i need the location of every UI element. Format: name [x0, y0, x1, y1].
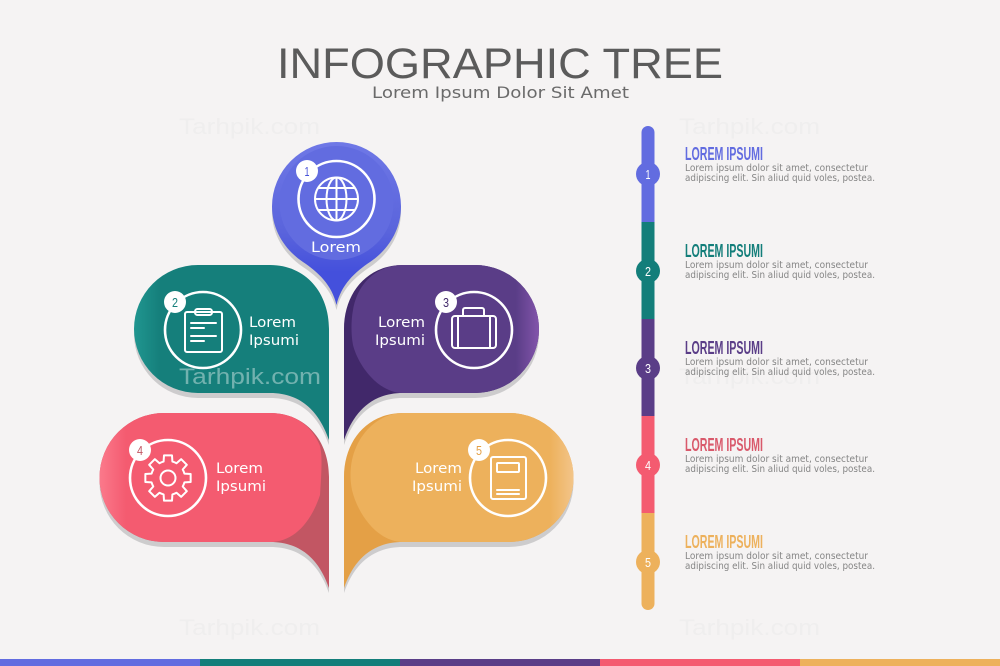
text block 1: adipiscing elit. Sin aliud quid voles, postea. — [685, 173, 875, 184]
text: Tarhpik.com — [679, 615, 820, 640]
label: Lorem Ipsumi: Lorem — [378, 315, 425, 331]
bottom colour bar — [0, 659, 1000, 666]
text block 2: LOREM IPSUMI — [685, 241, 763, 261]
badge 4 — [129, 439, 151, 461]
text block 1 — [685, 144, 875, 184]
marker 1 — [636, 162, 660, 186]
marker 2: 2 — [645, 264, 651, 279]
text block 4: adipiscing elit. Sin aliud quid voles, postea. — [685, 464, 875, 475]
text block 4 — [685, 435, 875, 475]
text block 2: Lorem ipsum dolor sit amet, consectetur — [685, 260, 868, 271]
label: Lorem Ipsumi — [412, 461, 462, 495]
icon: ring and clipboard — [165, 292, 241, 368]
text block 4: LOREM IPSUMI — [685, 435, 763, 455]
marker 1: 1 — [646, 167, 650, 182]
marker 3 — [636, 356, 660, 380]
badge 4: 4 — [137, 443, 143, 458]
watermark: Tarhpik.com — [179, 364, 321, 389]
text block 1: Lorem ipsum dolor sit amet, consectetur — [685, 163, 868, 174]
marker 2 — [636, 259, 660, 283]
marker 5 — [636, 550, 660, 574]
text block 2: adipiscing elit. Sin aliud quid voles, postea. — [685, 270, 875, 281]
text: Tarhpik.com — [179, 114, 320, 139]
badge 2: 2 — [172, 295, 178, 310]
text block 1: LOREM IPSUMI — [685, 144, 763, 164]
badge 3 — [435, 291, 457, 313]
subtitle: Lorem Ipsum Dolor Sit Amet — [372, 83, 629, 102]
badge 5: 5 — [476, 443, 482, 458]
label: Lorem Ipsumi: Lorem — [216, 461, 263, 477]
badge 1: 1 — [304, 164, 310, 179]
label: Lorem Ipsumi — [249, 315, 299, 349]
marker 3: 3 — [645, 361, 651, 376]
text: Tarhpik.com — [179, 615, 320, 640]
text block 3: LOREM IPSUMI — [685, 338, 763, 358]
text block 4: Lorem ipsum dolor sit amet, consectetur — [685, 454, 868, 465]
icon: ring and gear — [130, 440, 206, 516]
marker 4: 4 — [645, 458, 651, 473]
text: Tarhpik.com — [679, 364, 820, 389]
text block 3: adipiscing elit. Sin aliud quid voles, postea. — [685, 367, 875, 378]
icon: ring and book — [470, 440, 546, 516]
badge 1 — [296, 160, 318, 182]
label: Lorem Ipsumi: Ipsumi — [412, 479, 462, 495]
panel: leaf 4 red — [100, 413, 329, 593]
label: Lorem Ipsumi: Lorem — [249, 315, 296, 331]
badge 5 — [468, 439, 490, 461]
text block 5 — [685, 532, 875, 572]
text block 5: adipiscing elit. Sin aliud quid voles, postea. — [685, 561, 875, 572]
title: INFOGRAPHIC TREE — [277, 40, 723, 88]
label: Lorem Ipsumi: Ipsumi — [375, 333, 425, 349]
label: Lorem Ipsumi: Ipsumi — [249, 333, 299, 349]
text block 5: LOREM IPSUMI — [685, 532, 763, 552]
label: Lorem Ipsumi — [375, 315, 425, 349]
panel: tree diagram — [100, 142, 574, 593]
icon: ring and globe — [298, 161, 374, 237]
label: Lorem Ipsumi: Lorem — [415, 461, 462, 477]
text: Tarhpik.com — [679, 114, 820, 139]
text block 2 — [685, 241, 875, 281]
text block 5: Lorem ipsum dolor sit amet, consectetur — [685, 551, 868, 562]
label: Lorem Ipsumi: Ipsumi — [216, 479, 266, 495]
marker 4 — [636, 453, 660, 477]
label: Lorem Ipsumi — [216, 461, 266, 495]
text block 3 — [685, 338, 875, 378]
panel: pin 1 blue — [272, 142, 401, 310]
panel: leaf 2 teal — [134, 265, 329, 445]
timeline — [636, 126, 660, 610]
badge 2 — [164, 291, 186, 313]
panel: leaf 3 purple — [344, 265, 539, 445]
marker 5: 5 — [645, 555, 651, 570]
label: Lorem: Lorem — [311, 240, 361, 256]
icon: ring and briefcase — [436, 292, 512, 368]
badge 3: 3 — [443, 295, 449, 310]
panel: leaf 5 orange — [344, 413, 574, 593]
text block 3: Lorem ipsum dolor sit amet, consectetur — [685, 357, 868, 368]
